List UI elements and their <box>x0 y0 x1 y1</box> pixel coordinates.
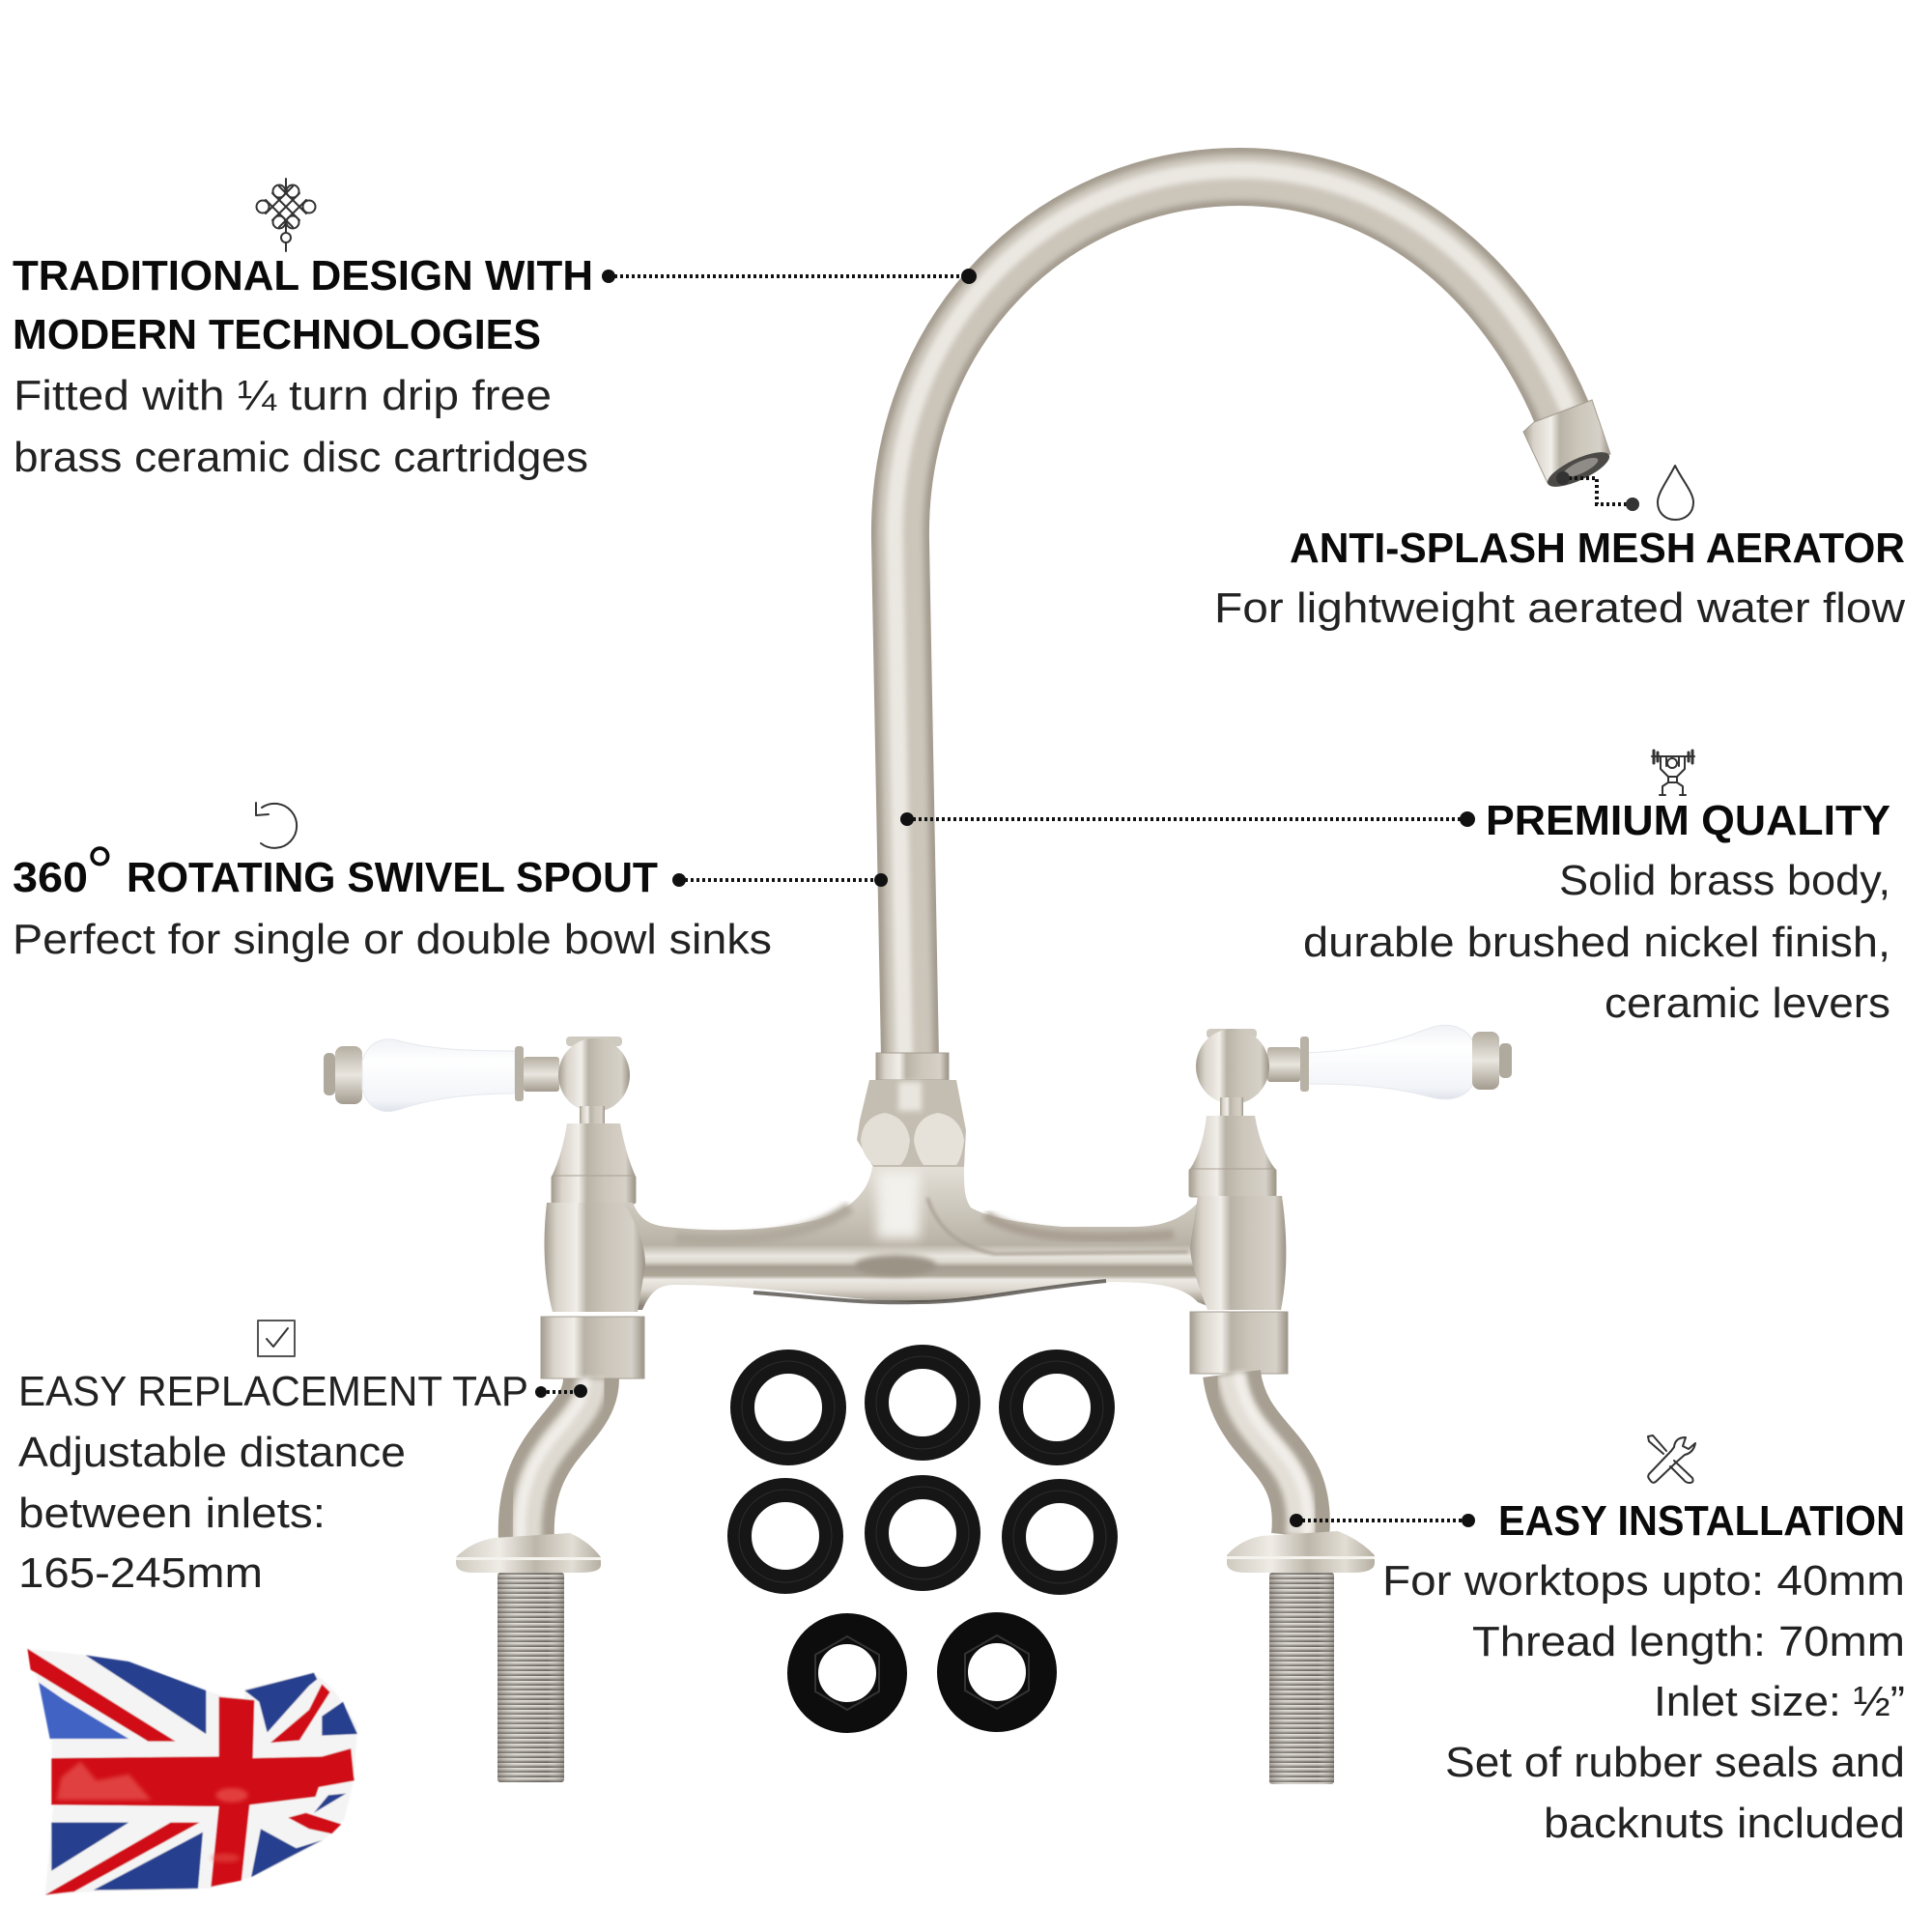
body text: For lightweight aerated water flow <box>1214 584 1905 632</box>
body text: 165-245mm <box>18 1549 263 1597</box>
icon: crossed tools <box>1648 1435 1695 1483</box>
aerator nozzle <box>1523 400 1613 494</box>
compression nuts <box>541 1312 1288 1378</box>
heading: EASY REPLACEMENT TAP <box>18 1368 528 1415</box>
body text: Perfect for single or double bowl sinks <box>13 916 772 963</box>
body text: Adjustable distance <box>18 1429 406 1476</box>
seal 4 <box>739 1490 832 1582</box>
left valve head <box>552 1037 636 1204</box>
icon: weightlifter <box>1652 751 1694 795</box>
heading: EASY INSTALLATION <box>1498 1497 1905 1545</box>
heading: 360 <box>13 854 88 901</box>
lower pipes <box>521 1374 1308 1541</box>
body text: Thread length: 70mm <box>1472 1618 1905 1665</box>
backnut right <box>952 1628 1041 1717</box>
icon: endless knot <box>257 179 315 251</box>
threaded inlets <box>497 1573 1334 1784</box>
heading: ANTI-SPLASH MESH AERATOR <box>1290 525 1905 572</box>
heading: ROTATING SWIVEL SPOUT <box>127 854 658 901</box>
bridge body <box>618 1167 1217 1310</box>
body text: durable brushed nickel finish, <box>1303 919 1890 966</box>
leader line <box>672 873 888 887</box>
backnuts <box>803 1628 1041 1718</box>
body text: Inlet size: ½” <box>1654 1678 1905 1725</box>
rubber seals <box>739 1356 1106 1583</box>
body text <box>14 372 588 481</box>
icon: checkbox <box>258 1321 295 1356</box>
body text <box>18 1429 406 1597</box>
body columns <box>545 1196 1286 1312</box>
body text: For worktops upto: 40mm <box>1382 1557 1905 1605</box>
right valve head <box>1189 1029 1276 1197</box>
heading: PREMIUM QUALITY <box>1486 797 1890 844</box>
mounting flanges <box>456 1531 1375 1573</box>
left ceramic handle <box>324 1039 559 1112</box>
leader line <box>602 269 977 284</box>
leader line <box>1556 471 1639 511</box>
right ceramic handle <box>1267 1025 1512 1099</box>
faucet illustration <box>324 170 1613 1784</box>
icon: water drop <box>1658 466 1693 520</box>
leader line <box>1290 1514 1475 1527</box>
body text <box>1303 857 1890 1027</box>
body text: between inlets: <box>18 1490 326 1537</box>
seal 2 <box>876 1356 969 1449</box>
leader line <box>535 1384 587 1398</box>
heading: TRADITIONAL DESIGN WITH <box>13 252 593 299</box>
heading: ° <box>86 834 114 911</box>
body text: ceramic levers <box>1605 980 1890 1027</box>
callout: premium quality <box>900 751 1890 1027</box>
body text: backnuts included <box>1544 1800 1905 1847</box>
seal 3 <box>1010 1361 1103 1454</box>
body text <box>1382 1557 1905 1847</box>
seal 6 <box>1013 1491 1106 1583</box>
body text: Solid brass body, <box>1559 857 1890 904</box>
body text: brass ceramic disc cartridges <box>14 434 588 481</box>
backnut left <box>803 1629 892 1718</box>
callout: traditional design <box>13 179 977 481</box>
heading <box>13 834 658 911</box>
icon: rotate arrow <box>256 803 297 848</box>
spout tube <box>895 170 1569 1058</box>
leader line <box>900 811 1475 827</box>
callout: swivel spout <box>13 803 888 963</box>
UK flag <box>27 1649 357 1895</box>
callout: easy replacement <box>18 1321 587 1597</box>
spout collar and hex nut <box>857 1053 966 1167</box>
seal 5 <box>876 1487 969 1579</box>
heading: MODERN TECHNOLOGIES <box>13 311 541 358</box>
callout: aerator <box>1214 466 1905 632</box>
body text: Set of rubber seals and <box>1445 1739 1905 1786</box>
callout: easy installation <box>1290 1435 1905 1847</box>
seal 1 <box>742 1361 835 1454</box>
heading <box>13 252 593 358</box>
body text: Fitted with ¼ turn drip free <box>14 372 552 419</box>
